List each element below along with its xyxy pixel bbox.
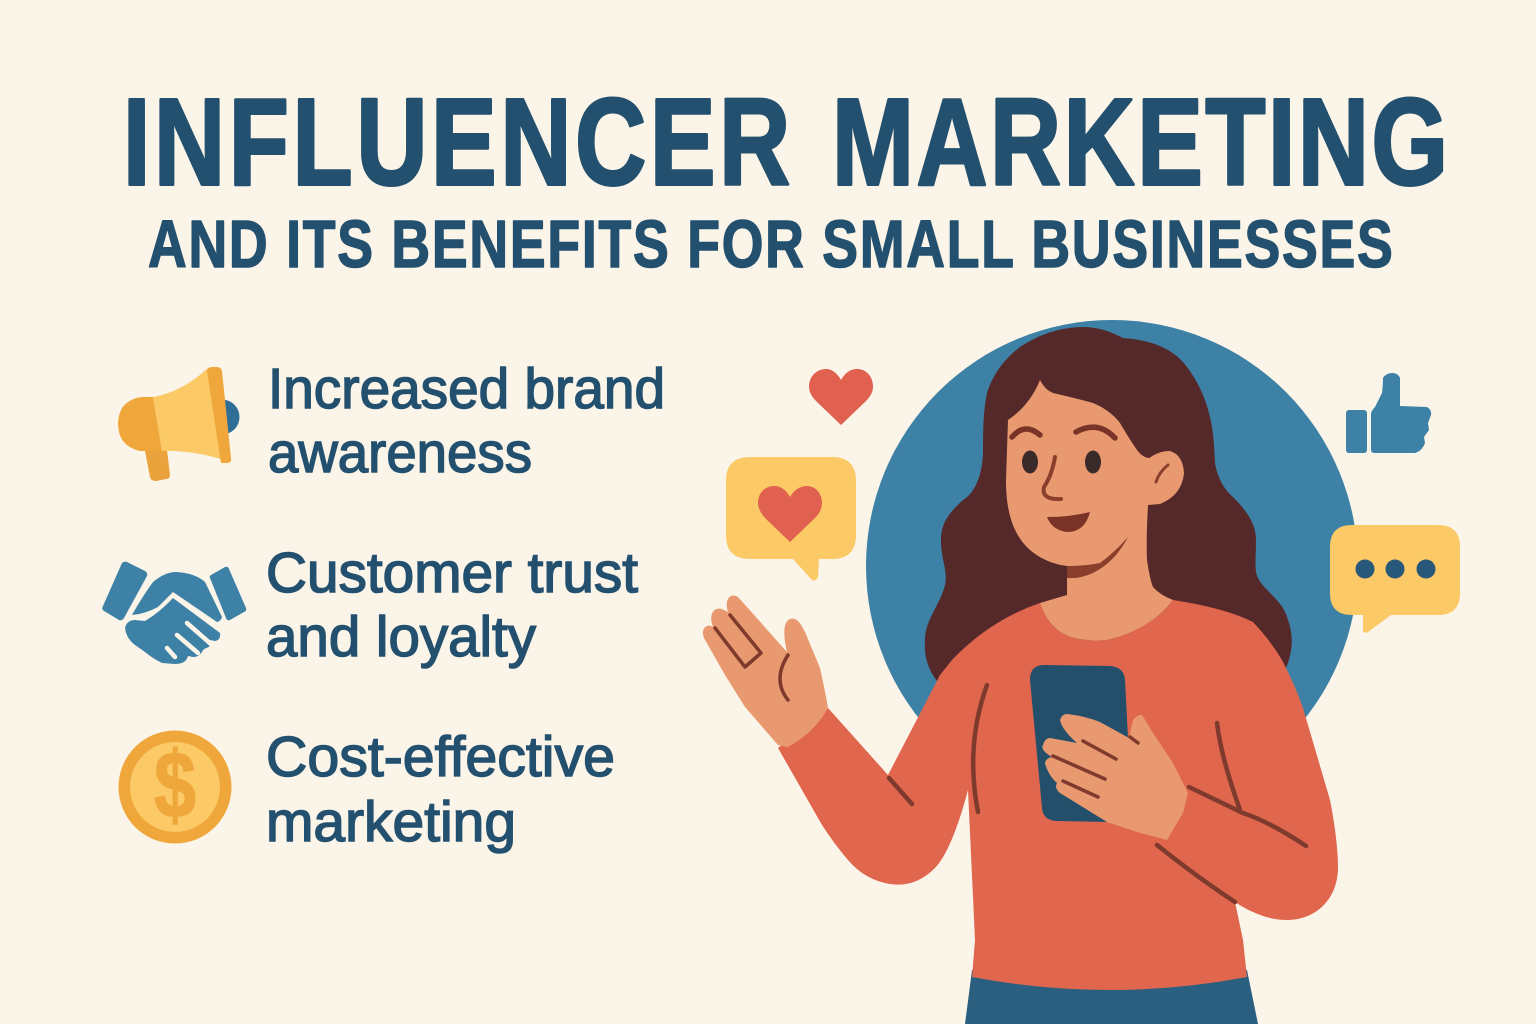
benefit: customer trust [102, 541, 638, 669]
ear line [1156, 465, 1168, 482]
text: increased brand awareness: awareness [268, 421, 532, 485]
icon: thumbs up [1346, 373, 1431, 453]
pants [965, 970, 1258, 1024]
illustration: influencer with phone [703, 320, 1358, 1024]
benefit: cost-effective [118, 725, 615, 854]
eyes [1022, 450, 1101, 474]
icon: dollar coin [118, 730, 232, 844]
phone [1030, 665, 1132, 822]
hand holding phone [1042, 714, 1188, 840]
face and neck [1006, 380, 1173, 641]
ear [1148, 451, 1184, 505]
sweater fold lines [889, 685, 1306, 902]
text: cost-effective marketing: marketing [266, 790, 516, 854]
icon: typing speech bubble [1330, 525, 1460, 633]
finger lines [1053, 737, 1138, 797]
nose [1044, 457, 1061, 499]
sweater [778, 600, 1338, 990]
title [123, 73, 1448, 211]
text: customer trust and loyalty: Customer trust [266, 541, 638, 605]
text: increased brand awareness: Increased brand [268, 357, 665, 421]
text: cost-effective marketing [266, 725, 615, 854]
raised hand [703, 595, 828, 747]
hand creases [715, 615, 788, 700]
subtitle: AND ITS BENEFITS FOR SMALL BUSINESSES [148, 206, 1393, 281]
text: cost-effective marketing: Cost-effective [266, 725, 615, 789]
icon: heart speech bubble [726, 457, 856, 581]
hair [925, 327, 1292, 690]
title: INFLUENCER [123, 73, 790, 211]
benefit: brand awareness [118, 357, 665, 485]
eyebrows [1012, 427, 1115, 438]
mouth [1047, 512, 1090, 532]
icon: megaphone [118, 367, 240, 481]
text: customer trust and loyalty: and loyalty [266, 605, 536, 669]
blue circle backdrop [866, 320, 1358, 812]
title: MARKETING [832, 73, 1448, 211]
icon: floating heart [809, 369, 873, 425]
neck shadow [1067, 537, 1128, 578]
text: customer trust and loyalty [266, 541, 638, 669]
icon: dollar coin: $ [154, 733, 196, 838]
icon: handshake [102, 562, 246, 664]
text: increased brand awareness [268, 357, 665, 485]
